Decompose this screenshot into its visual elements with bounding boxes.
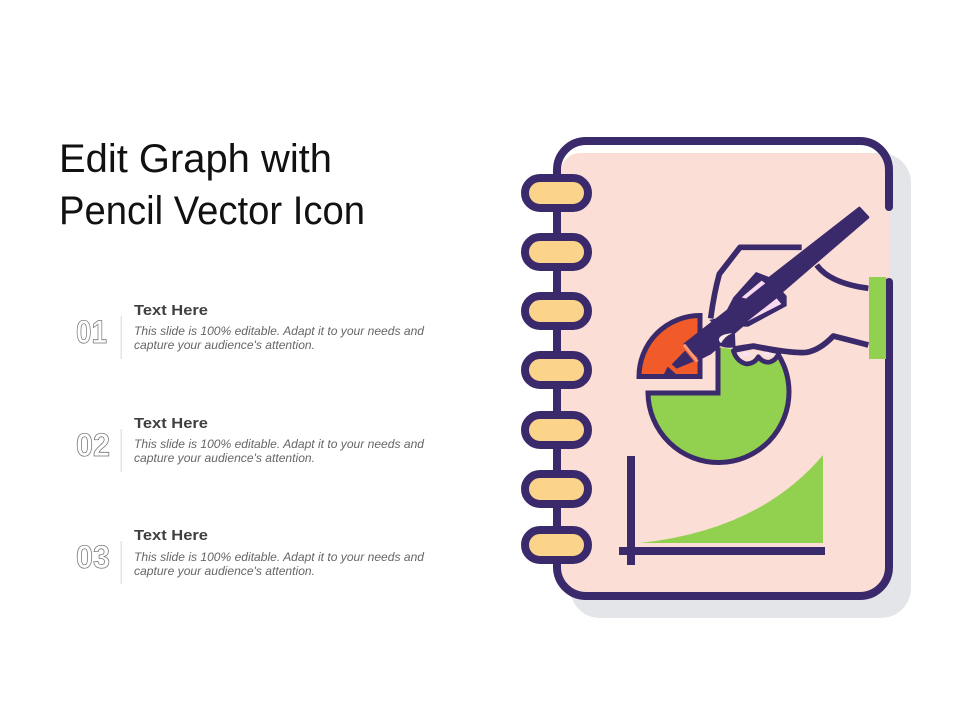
hand fill xyxy=(711,247,868,353)
list item 02: capture your audience's attention. xyxy=(134,451,315,465)
notebook page xyxy=(561,153,889,592)
notebook shadow xyxy=(570,153,911,618)
finger grip xyxy=(709,272,787,327)
list item 02 xyxy=(76,415,424,472)
list item 03: 03 xyxy=(76,539,110,575)
pie chart: orange segment xyxy=(639,316,700,376)
icon: notebook with graph and pencil xyxy=(525,141,911,618)
hand and pencil xyxy=(664,208,868,374)
list item 01: This slide is 100% editable. Adapt it to your needs and xyxy=(134,324,424,338)
pencil body xyxy=(685,208,868,358)
title: Edit Graph with xyxy=(59,137,332,181)
pencil tip xyxy=(672,351,694,369)
grip highlights xyxy=(742,281,765,299)
notebook outline xyxy=(557,141,889,596)
title: Pencil Vector Icon xyxy=(59,189,365,233)
list item 01: Text Here xyxy=(134,302,208,319)
area chart xyxy=(640,455,823,543)
list item 02: 02 xyxy=(76,427,110,463)
list item 02: Text Here xyxy=(134,415,208,432)
wrist cuff xyxy=(869,277,886,359)
title xyxy=(59,137,365,233)
hand outline xyxy=(711,247,868,353)
list item 01: 01 xyxy=(76,314,107,350)
list item 01: capture your audience's attention. xyxy=(134,338,315,352)
knuckles xyxy=(733,347,779,364)
list item 03: This slide is 100% editable. Adapt it to your needs and xyxy=(134,550,424,564)
list item 01 xyxy=(76,302,424,359)
spiral rings xyxy=(525,178,588,560)
list item 03: capture your audience's attention. xyxy=(134,564,315,578)
thumbnail xyxy=(717,332,734,346)
list item 03: Text Here xyxy=(134,527,208,544)
list item 02: This slide is 100% editable. Adapt it to your needs and xyxy=(134,437,424,451)
chart axes xyxy=(619,456,825,565)
list item 03 xyxy=(76,527,424,584)
pie chart: green segment xyxy=(648,321,789,462)
pencil band xyxy=(684,345,697,362)
